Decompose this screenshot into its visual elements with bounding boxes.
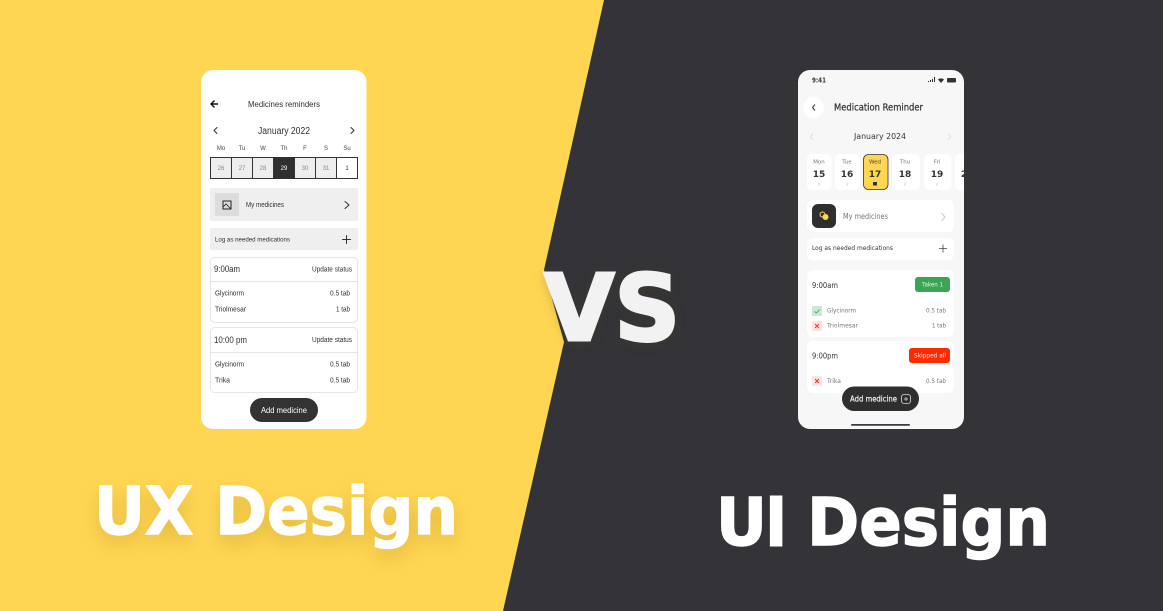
card: 9:00am schedule: Glycinorm: [215, 290, 244, 298]
date selector strip: 18: [899, 170, 911, 180]
button: add medicine: Add medicine: [261, 405, 307, 415]
weekday labels: S: [324, 146, 328, 152]
panel: UX wireframe phone: [201, 70, 366, 429]
row: log as needed medications: [807, 238, 954, 260]
yellow diagonal background panel: [0, 0, 604, 611]
date selector strip: [807, 154, 967, 190]
medicine: triolmesar skipped: 1 tab: [932, 322, 946, 330]
card: 9:00pm schedule: [807, 341, 954, 393]
heading: UI Design: UI Design: [716, 482, 1050, 561]
card: 10:00 pm schedule: [210, 328, 358, 392]
weekday labels: F: [303, 146, 307, 152]
card: 9:00pm schedule: 9:00pm: [812, 352, 838, 360]
weekday labels: W: [260, 146, 266, 152]
panel: UI finished phone: [798, 70, 967, 429]
date selector strip: 2: [961, 170, 967, 180]
calendar date strip: 29: [281, 166, 288, 172]
card: 9:00am schedule: Update status: [312, 266, 352, 274]
calendar date strip: 31: [323, 166, 330, 172]
home indicator: [851, 424, 910, 426]
row: my medicines: My medicines: [246, 202, 284, 209]
medicine: glycinorm taken: Glycinorm: [827, 308, 856, 314]
weekday labels: Th: [280, 146, 288, 152]
calendar date strip: 30: [302, 166, 309, 172]
card: 10:00 pm schedule: Glycinorm: [215, 362, 244, 368]
month label: January 2022: [258, 126, 310, 137]
card: 9:00am schedule: 0.5 tab: [330, 290, 350, 298]
weekday labels: Tu: [239, 146, 245, 152]
card: 10:00 pm schedule: 10:00 pm: [214, 335, 247, 345]
weekday labels: Su: [343, 146, 351, 152]
date selector strip: 19: [931, 170, 943, 180]
date selector strip: Fri: [934, 160, 941, 166]
medicine: triolmesar skipped: [812, 321, 946, 331]
button: add medicine: [842, 386, 919, 411]
card: 9:00am schedule: 9:00am: [214, 264, 240, 274]
medicine: glycinorm taken: 0.5 tab: [926, 308, 946, 314]
row: my medicines: [210, 188, 358, 221]
button: add medicine: [250, 398, 318, 422]
badge: taken 1: [915, 277, 950, 292]
card: 9:00am schedule: 9:00am: [812, 281, 838, 290]
row: my medicines: [807, 200, 954, 232]
weekday labels: Mo: [217, 146, 226, 152]
date selector strip: Tue: [841, 160, 852, 166]
icon: back button: [803, 97, 824, 118]
calendar date strip: 27: [239, 166, 246, 172]
card: 9:00am schedule: 1 tab: [336, 306, 350, 314]
button: add medicine: Add medicine: [850, 394, 897, 404]
VS mark: VS: [544, 255, 680, 362]
date selector strip: Mon: [813, 160, 825, 166]
card: 9:00am schedule: Triolmesar: [215, 306, 247, 314]
row: log as needed medications: [210, 228, 358, 250]
weekday labels: [217, 146, 351, 152]
status bar: 9:41: [812, 76, 826, 84]
card: 10:00 pm schedule: 0.5 tab: [330, 378, 350, 384]
date selector strip: Wed: [869, 160, 881, 166]
icon: next month: [351, 128, 354, 134]
row: log as needed medications: Log as needed medications: [812, 245, 893, 252]
calendar date strip: 26: [218, 166, 225, 172]
month label: January 2024: [853, 132, 906, 141]
row: log as needed medications: Log as needed medications: [215, 236, 291, 244]
date selector strip: 17: [869, 170, 881, 180]
heading: UX Design: UX Design: [94, 473, 458, 550]
calendar date strip: [210, 158, 358, 178]
badge: taken 1: Taken 1: [921, 282, 943, 288]
medicine: trika skipped: 0.5 tab: [926, 378, 946, 385]
card: 10:00 pm schedule: Trika: [215, 378, 230, 384]
icon: previous month: [214, 128, 217, 134]
icon: next month: [948, 133, 950, 140]
status bar: [812, 76, 956, 84]
medicine: trika skipped: Trika: [826, 378, 841, 385]
heading: medicines reminders: Medicines reminders: [248, 99, 320, 109]
calendar date strip: 28: [260, 166, 267, 172]
card: 10:00 pm schedule: 0.5 tab: [330, 362, 350, 368]
card: 9:00am schedule: [807, 270, 954, 337]
card: 10:00 pm schedule: Update status: [312, 337, 352, 344]
heading: medication reminder: Medication Reminder: [834, 102, 923, 114]
badge: skipped all: [909, 348, 950, 363]
medicine: glycinorm taken: [812, 306, 946, 316]
calendar date strip: 1: [345, 166, 349, 172]
row: my medicines: My medicines: [843, 212, 888, 221]
icon: previous month: [810, 133, 813, 140]
badge: skipped all: Skipped all: [914, 352, 946, 360]
card: 9:00am schedule: [210, 258, 358, 322]
medicine: trika skipped: [812, 376, 946, 386]
icon: back arrow: [211, 100, 218, 108]
medicine: triolmesar skipped: Triolmesar: [826, 322, 859, 330]
date selector strip: Thu: [899, 160, 910, 166]
date selector strip: 16: [841, 170, 853, 180]
date selector strip: 15: [813, 170, 825, 180]
